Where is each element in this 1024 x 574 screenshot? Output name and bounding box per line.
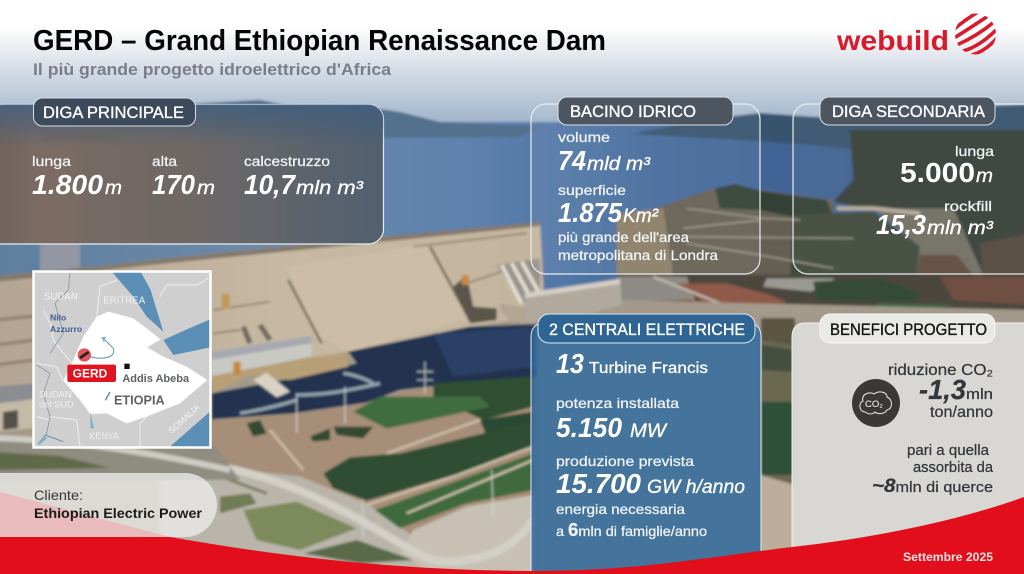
stat: potenza installata: 5.150 (556, 412, 622, 443)
panel: 2 centrali elettriche background (531, 323, 761, 574)
stat: rockfill: 15,3 (876, 209, 926, 240)
stat: riduzione CO2: -1,3 (919, 374, 966, 405)
stat: turbine (556, 348, 708, 379)
ground base (0, 300, 1024, 574)
stat: potenza installata (556, 395, 679, 443)
stat: alta (152, 153, 215, 200)
stat: riduzione CO2: ton/anno (930, 404, 993, 421)
heading tab: 2 centrali elettriche (538, 314, 755, 343)
powerhouse (212, 336, 312, 360)
stat: calcestruzzo (244, 153, 364, 200)
ethiopia territory (63, 312, 207, 423)
stat: calcestruzzo: mln m³ (296, 178, 364, 199)
title: GERD – Grand Ethiopian Renaissance Dam (33, 25, 606, 57)
panel: 2 centrali elettriche content (538, 314, 755, 540)
client pill (0, 473, 217, 537)
stat: lunga: 1.800 (32, 169, 103, 200)
note: querce: assorbita da (913, 459, 994, 476)
stat: calcestruzzo: calcestruzzo (244, 153, 330, 169)
stat: lunga (32, 153, 122, 200)
left road bands below map (0, 440, 240, 480)
map of Ethiopia: del SUD (39, 400, 74, 410)
subtitle: Il più grande progetto idroelettrico d'Africa (33, 60, 392, 79)
note: famiglie: a 6mln di famiglie/anno (556, 520, 707, 540)
lower terrain strip (617, 275, 1024, 333)
stat: lunga (900, 143, 994, 188)
panel: benefici progetto content (820, 314, 995, 497)
GERD marker: GERD (73, 367, 108, 381)
map of Ethiopia: SUDAN (39, 389, 72, 399)
map of Ethiopia: Azzurro (50, 324, 82, 334)
note: confronto con Londra: più grande dell'area (558, 229, 689, 245)
note: famiglie (556, 501, 707, 540)
panel: diga secondaria (793, 97, 1024, 274)
client pill: Ethiopian Electric Power (34, 505, 203, 521)
spillway (497, 258, 540, 303)
stat: superficie: 1.875 (558, 197, 622, 228)
stat: calcestruzzo: 10,7 (244, 169, 296, 200)
icon: CO2 cloud (852, 379, 900, 427)
stat: volume (558, 129, 651, 176)
stat: riduzione CO2 (888, 362, 993, 421)
stat: superficie: Km² (623, 206, 659, 227)
date: Settembre 2025 (903, 552, 994, 564)
note: querce: pari a quella (907, 442, 990, 459)
stat: produzione prevista: 15.700 (556, 468, 641, 499)
heading tab: benefici progetto (820, 314, 995, 343)
client pill: Cliente: (34, 487, 83, 503)
stat: produzione prevista: GW h/anno (647, 477, 745, 498)
stat: superficie (558, 182, 659, 228)
sea areas (112, 272, 210, 447)
stat: rockfill (876, 198, 994, 240)
stat: lunga: m (105, 178, 122, 199)
stat: lunga: lunga (32, 153, 71, 169)
note: confronto con Londra (558, 229, 718, 263)
stat: volume: 74 (558, 145, 586, 176)
stat: riduzione CO2: riduzione CO₂ (888, 362, 993, 379)
heading tab: diga secondaria (820, 97, 995, 125)
distant hills (0, 100, 540, 138)
stat: volume: mld m³ (587, 154, 651, 175)
panel: bacino idrico (531, 97, 760, 274)
stat: rockfill: rockfill (944, 198, 992, 214)
right powerhouse building (525, 279, 622, 322)
stat: superficie: superficie (558, 182, 626, 198)
heading tab: 2 centrali elettriche: 2 CENTRALI ELETTRICHE (549, 320, 745, 339)
logo: webuild: webuild (836, 25, 949, 56)
map of Ethiopia: KENYA (89, 431, 119, 441)
stat: turbine: Turbine Francis (589, 360, 708, 377)
panel: benefici progetto background (792, 323, 1024, 574)
stat: potenza installata: potenza installata (556, 395, 679, 411)
stat: alta: alta (152, 153, 177, 169)
note: querce (872, 442, 994, 497)
note: confronto con Londra: metropolitana di Londra (558, 247, 718, 263)
stat: rockfill: mln m³ (927, 218, 994, 239)
logo: webuild (836, 12, 997, 56)
stat: lunga: lunga (955, 143, 994, 159)
stat: produzione prevista (556, 453, 745, 499)
map of Ethiopia (33, 271, 211, 448)
map of Ethiopia: SOMALIA (166, 402, 202, 435)
panel: diga principale (0, 98, 384, 244)
heading tab: bacino idrico: BACINO IDRICO (570, 102, 696, 121)
stat: lunga: 5.000 (900, 157, 975, 188)
icon: CO2 cloud: CO₂ (865, 399, 883, 410)
water at dam toe (212, 324, 537, 419)
heading tab: diga principale: DIGA PRINCIPALE (43, 103, 184, 122)
country labels: SUDAN (44, 291, 78, 302)
riverbank and vegetation (160, 377, 537, 574)
note: famiglie: energia necessaria (556, 501, 685, 517)
main dam (0, 222, 545, 430)
stat: alta: 170 (152, 169, 195, 200)
stat: riduzione CO2: mln (966, 386, 993, 403)
heading tab: benefici progetto: BENEFICI PROGETTO (830, 320, 987, 339)
GERD marker (67, 348, 116, 382)
stat: lunga: m (976, 166, 993, 187)
stat: volume: volume (558, 129, 610, 145)
map of Ethiopia: ERITREA (103, 295, 146, 306)
stat: potenza installata: MW (630, 421, 668, 442)
heading tab: bacino idrico (558, 97, 733, 125)
map of Ethiopia: Addis Abeba (122, 373, 190, 385)
stat: alta: m (197, 178, 215, 199)
stat: produzione prevista: produzione prevista (556, 453, 694, 469)
red wave footer (0, 492, 1024, 574)
map of Ethiopia: ETIOPIA (114, 394, 165, 408)
map of Ethiopia: Nilo (50, 312, 66, 322)
heading tab: diga secondaria: DIGA SECONDARIA (832, 102, 986, 121)
stat: turbine: 13 (556, 348, 584, 379)
note: querce: ~8mln di querce (872, 476, 993, 497)
heading tab: diga principale (34, 98, 196, 126)
right hills and secondary dam (617, 130, 1024, 333)
